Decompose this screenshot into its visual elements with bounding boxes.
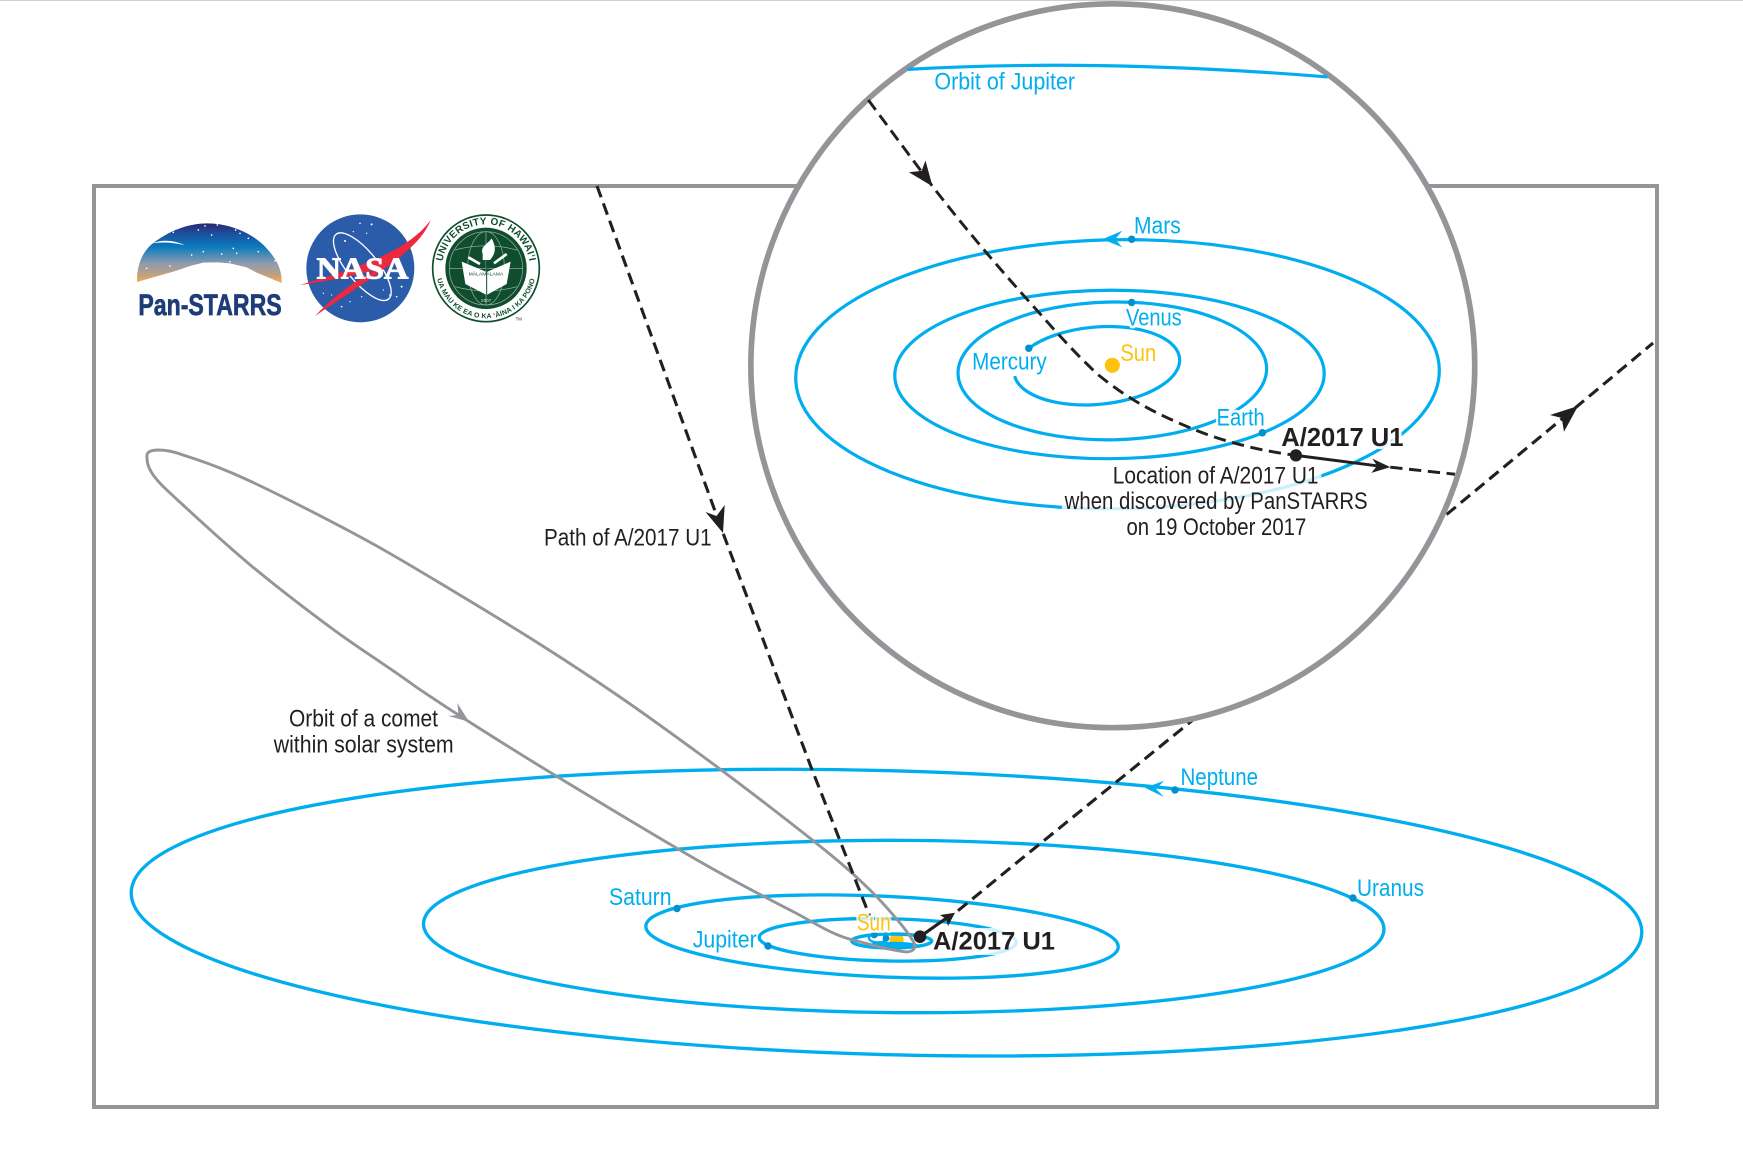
icon: sun in the outer view	[890, 933, 904, 947]
caption: discovery location: Location of A/2017 U1	[1113, 463, 1319, 490]
planet markers	[1025, 235, 1266, 437]
label: orbit of a comet: within solar system	[273, 732, 454, 759]
label: Sun: Sun	[857, 910, 891, 937]
Earth orbit	[894, 289, 1325, 460]
label: A/2017 U1: A/2017 U1	[1281, 424, 1403, 452]
label: Venus: Venus	[1126, 305, 1182, 332]
caption: discovery location: on 19 October 2017	[1126, 514, 1306, 541]
Mercury orbit	[1015, 327, 1180, 405]
logo: University of Hawai'i seal: UNIVERSITY OF HAWAI‘I	[436, 217, 536, 261]
arrow: Mars direction	[1102, 231, 1122, 247]
orbit of Jupiter arc	[908, 65, 1328, 77]
label: Mars: Mars	[1134, 213, 1181, 240]
label: Earth: Earth	[1217, 405, 1265, 432]
path of A/2017 U1 outbound	[958, 343, 1653, 911]
label: orbit of a comet: Orbit of a comet	[289, 706, 438, 733]
arrow: path direction in the circle	[909, 160, 933, 186]
logo: Pan-STARRS	[137, 223, 282, 322]
logo: University of Hawai'i seal: TM	[516, 317, 522, 322]
inner planet orbits in the outer view	[852, 932, 932, 949]
icon: Saturn dot	[673, 905, 681, 912]
logo: University of Hawai'i seal	[432, 214, 540, 322]
panel: inner solar system magnified circle	[751, 4, 1475, 728]
outer planet orbits	[127, 750, 1646, 1075]
logo: University of Hawai'i seal: UA MAU KE EA O KA ‘ĀINA I KA PONO	[438, 278, 534, 318]
Mars orbit	[794, 235, 1441, 513]
label: orbit of a comet	[273, 706, 454, 759]
logo: NASA	[300, 214, 431, 322]
arrow: outbound direction	[1550, 406, 1578, 432]
discovery position marker and arrow	[1290, 449, 1390, 473]
label: Neptune: Neptune	[1180, 764, 1258, 791]
logo: University of Hawai'i seal: MĀLAMALAMA	[469, 271, 503, 276]
arrow: comet orbit direction	[448, 703, 469, 722]
icon: Neptune dot	[1171, 786, 1179, 794]
logo: NASA: NASA	[317, 251, 408, 285]
label: orbit of Jupiter: Orbit of Jupiter	[934, 69, 1075, 96]
path of A/2017 U1 inbound	[597, 186, 870, 917]
label: Uranus: Uranus	[1357, 875, 1424, 902]
label: Sun: Sun	[1120, 340, 1156, 367]
path of A/2017 U1 through the inner system	[868, 100, 1455, 474]
arrow: Neptune direction	[1145, 781, 1164, 797]
label: Saturn: Saturn	[609, 884, 672, 911]
faded Jupiter orbit segment behind the label	[933, 928, 1023, 955]
arrow: inbound direction	[706, 505, 725, 533]
icon: sun	[1105, 358, 1120, 373]
caption: discovery location	[1064, 463, 1368, 541]
label: Mercury: Mercury	[972, 348, 1047, 375]
logo: Pan-STARRS: Pan-STARRS	[138, 289, 282, 322]
A/2017 U1 marker and short arrow	[914, 913, 955, 943]
logos	[137, 214, 540, 322]
panel: solar system frame	[94, 186, 1657, 1107]
label: path of A/2017 U1: Path of A/2017 U1	[544, 525, 712, 552]
Venus orbit	[957, 299, 1268, 442]
faded orbit segment behind the caption	[1062, 465, 1321, 517]
label: Jupiter: Jupiter	[693, 926, 757, 953]
logo: University of Hawai'i seal: 1907	[481, 298, 492, 303]
caption: discovery location: when discovered by PanSTARRS	[1064, 488, 1368, 515]
icon: Jupiter dot	[764, 942, 772, 950]
comet orbit	[147, 450, 915, 952]
icon: Uranus dot	[1349, 894, 1357, 902]
label: A/2017 U1: A/2017 U1	[933, 928, 1055, 956]
